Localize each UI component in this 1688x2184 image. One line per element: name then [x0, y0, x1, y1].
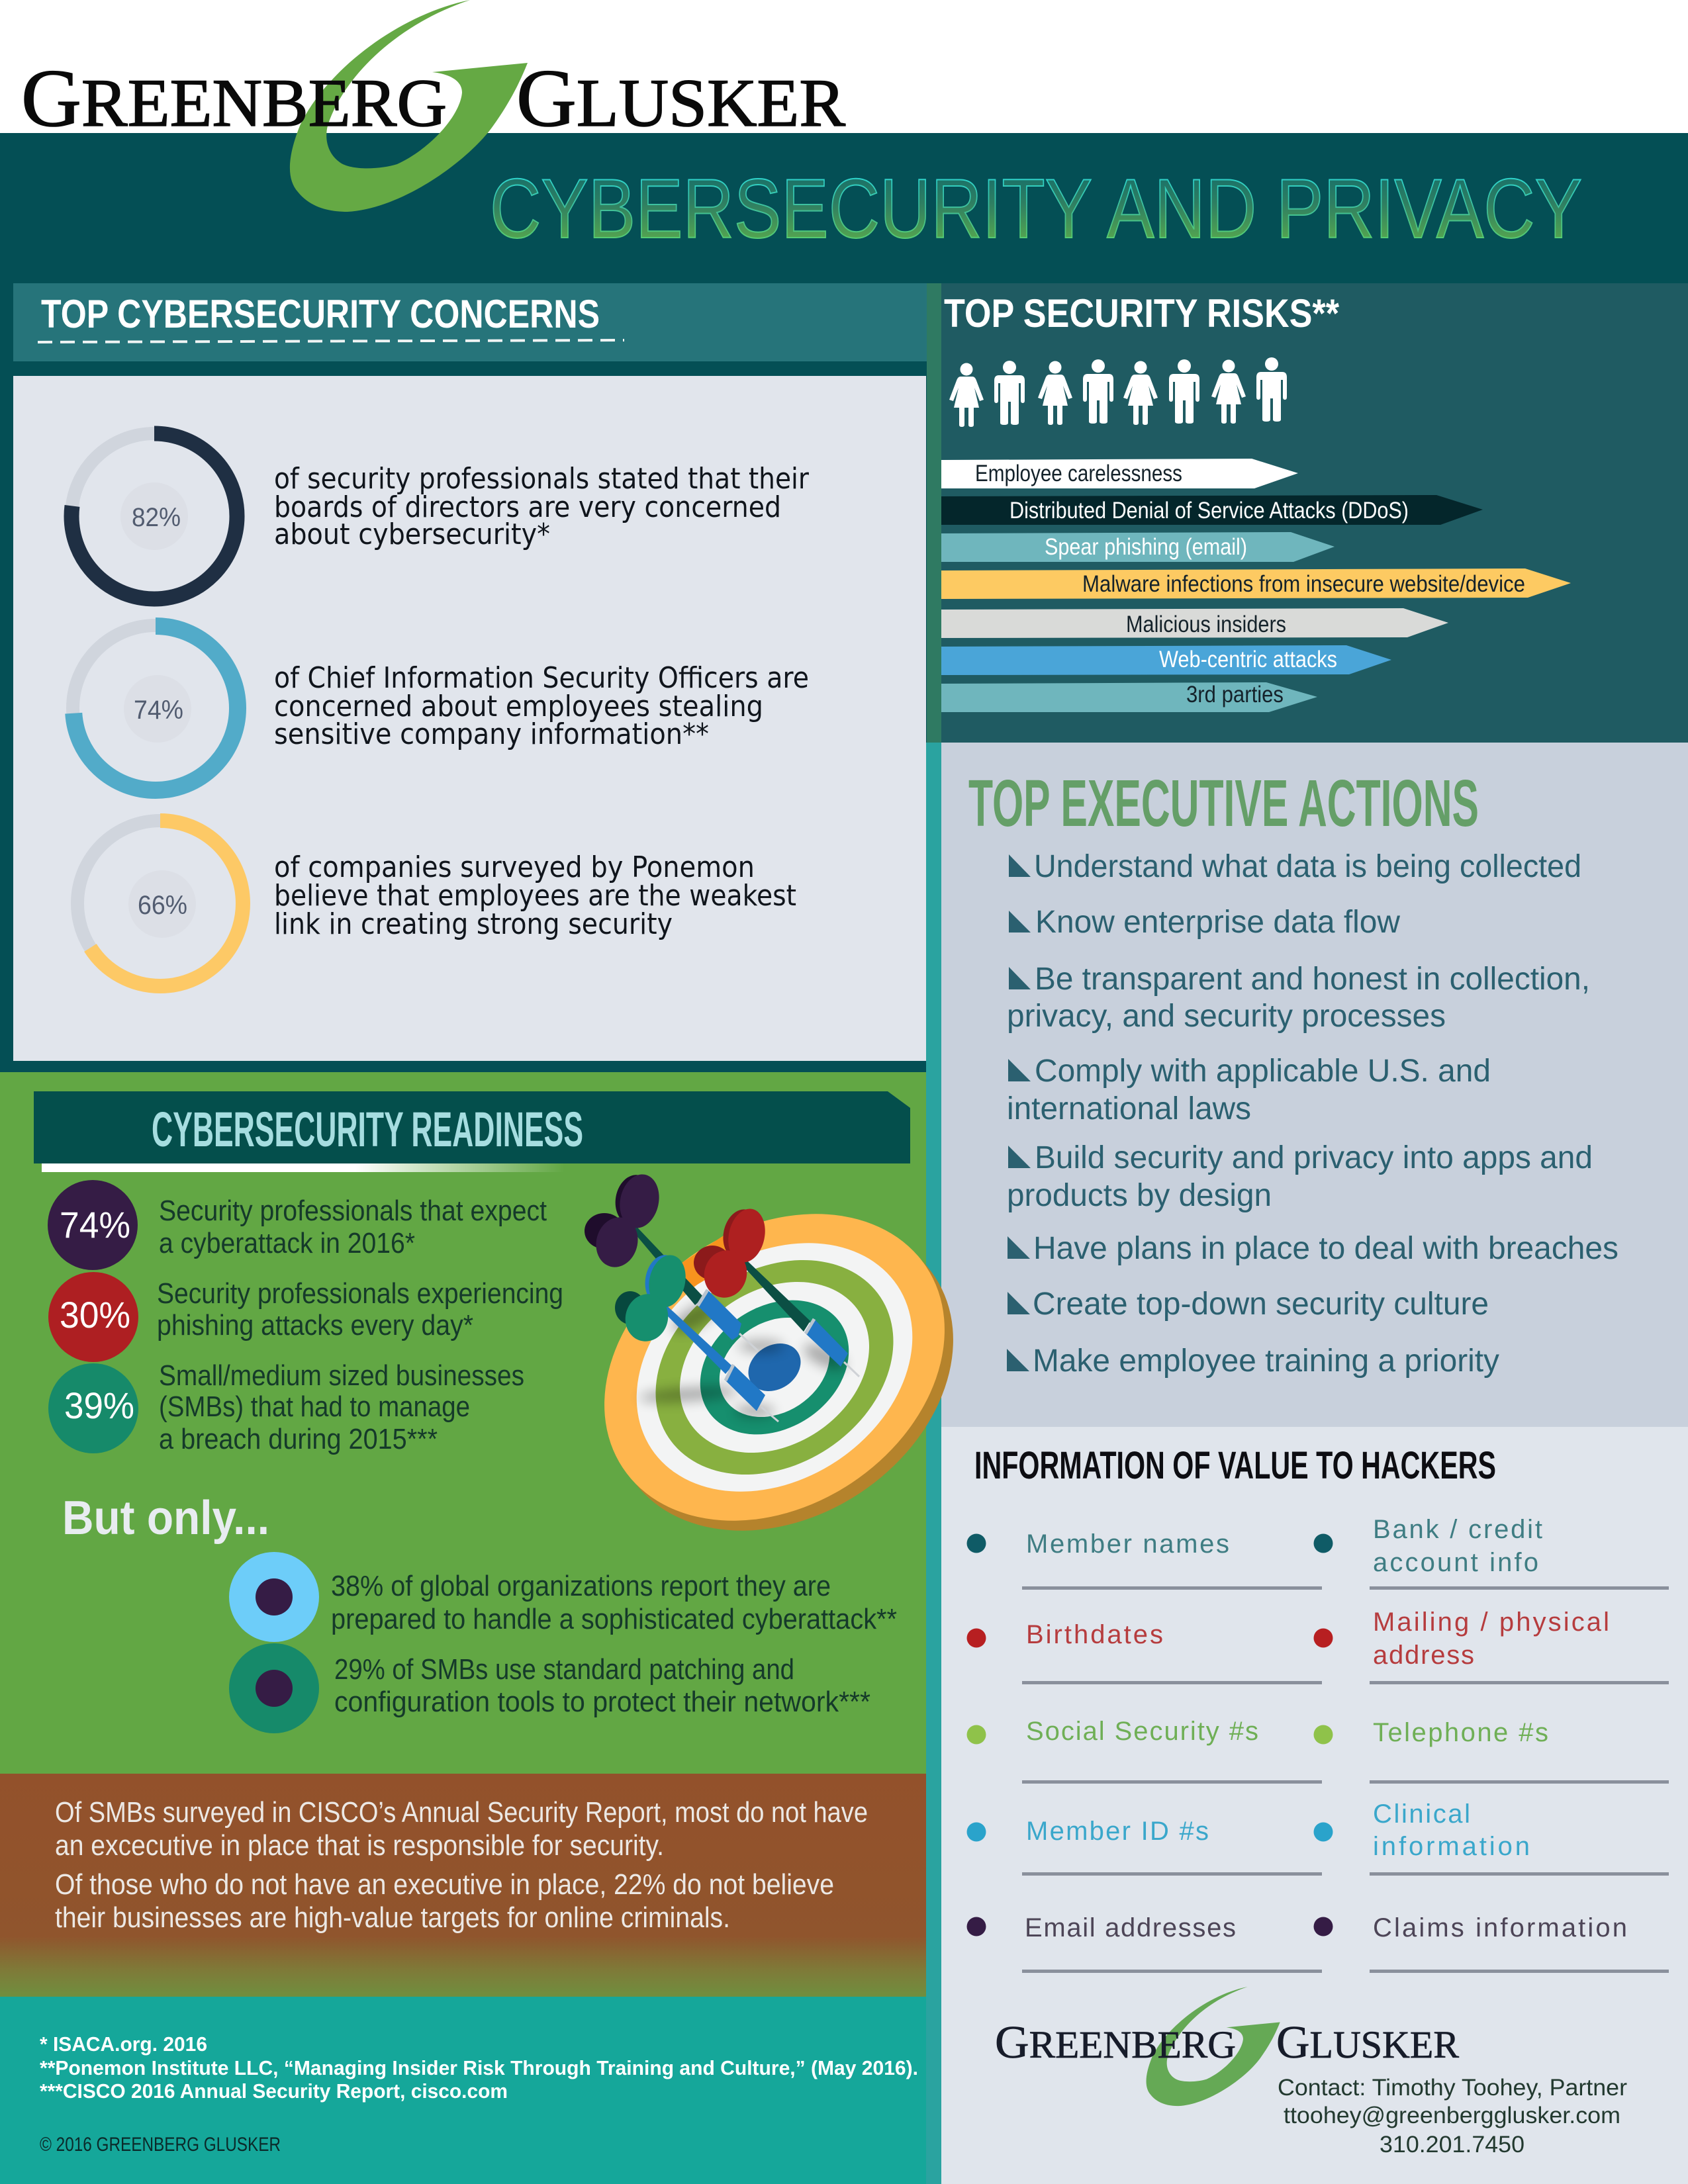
- list: executive actions: Build security and privacy into apps and: [1035, 1140, 1593, 1175]
- dart: purple: [585, 1171, 758, 1351]
- arrow: malicious insiders: [941, 608, 1448, 638]
- list: left column: Member ID #s: [1026, 1817, 1209, 1846]
- heading: but only: But only...: [62, 1492, 269, 1545]
- text: 82% statement: boards of directors are very concerned: [274, 490, 781, 524]
- text: 74% statement: [274, 661, 809, 751]
- arrow: web-centric attacks: [941, 645, 1391, 675]
- stat: 38%: prepared to handle a sophisticated cyberattack**: [331, 1603, 897, 1635]
- arrow: employee carelessness: Employee carelessness: [975, 461, 1182, 486]
- panel: cybersecurity readiness: [0, 1072, 926, 1774]
- illustration: dartboard with darts: [546, 1151, 1011, 1594]
- panel: footnotes: **Ponemon Institute LLC, “Managing Insider Risk Through Training and Culture,” (May 2016).: [40, 2056, 918, 2079]
- list: right column: Mailing / physical: [1373, 1608, 1609, 1637]
- list: left column: Email addresses: [1025, 1913, 1236, 1942]
- banner: readiness heading: CYBERSECURITY READINESS: [152, 1102, 583, 1157]
- banner: readiness heading: [34, 1091, 910, 1163]
- text: contact details: [1278, 2075, 1627, 2158]
- panel: footnotes: ***CISCO 2016 Annual Security Report, cisco.com: [40, 2079, 508, 2103]
- dart: red: [694, 1205, 859, 1377]
- panel: top executive actions: [941, 743, 1688, 1427]
- stat: 39%: a breach during 2015***: [159, 1423, 438, 1455]
- heading: information of value: INFORMATION OF VALUE TO HACKERS: [974, 1444, 1496, 1487]
- text: 82% statement: of security professionals stated that their: [274, 462, 810, 496]
- panel: top security risks: [927, 283, 1688, 743]
- logo: Greenberg Glusker top: [21, 0, 845, 212]
- arrow: web-centric attacks: Web-centric attacks: [1159, 647, 1337, 672]
- arrow: DDoS: Distributed Denial of Service Attacks (DDoS): [1009, 498, 1409, 523]
- text: contact details: ttoohey@greenbergglusker.com: [1284, 2103, 1620, 2128]
- text: 66% statement: of companies surveyed by Ponemon: [274, 850, 755, 884]
- donut: 74%: [73, 625, 238, 791]
- list: left column: Member names: [1026, 1529, 1229, 1559]
- arrow: employee carelessness: [941, 459, 1298, 488]
- donut: 66%: [77, 821, 243, 986]
- stat: 39%: 39%: [64, 1385, 134, 1426]
- stat: 30%: phishing attacks every day*: [157, 1309, 473, 1342]
- stat: 29%: 29% of SMBs use standard patching and: [334, 1653, 794, 1686]
- panel: CISCO findings: their businesses are high-value targets for online criminals.: [55, 1901, 730, 1934]
- arrow: malware infections: [941, 569, 1571, 599]
- list: right column: information: [1373, 1832, 1530, 1861]
- vertical teal stripe: [926, 743, 941, 2184]
- stat: 39%: (SMBs) that had to manage: [159, 1390, 470, 1423]
- logo: Greenberg Glusker bottom: GLUSKER: [1276, 2017, 1459, 2068]
- stat: 38%: 38% of global organizations report they are: [331, 1570, 831, 1602]
- arrow: spear phishing: Spear phishing (email): [1045, 534, 1247, 560]
- stat: 74%: [48, 1180, 547, 1270]
- stat: 39%: Small/medium sized businesses: [159, 1359, 524, 1392]
- list: right column: Bank / credit: [1373, 1515, 1542, 1544]
- heading: top security risks: TOP SECURITY RISKS**: [944, 291, 1340, 336]
- arrow: spear phishing: [941, 532, 1335, 562]
- text: 82% statement: about cybersecurity*: [274, 518, 550, 551]
- dart: green: [615, 1251, 778, 1422]
- text: 74% statement: of Chief Information Security Officers are: [274, 661, 809, 695]
- list: executive actions: privacy, and security processes: [1007, 999, 1446, 1034]
- arrow: malicious insiders: Malicious insiders: [1126, 612, 1286, 637]
- logo: Greenberg Glusker bottom: [995, 1987, 1459, 2106]
- logo: Greenberg Glusker top: GREENBERG: [21, 53, 447, 144]
- list: right column: account info: [1373, 1548, 1538, 1577]
- list: right column: Clinical: [1373, 1799, 1470, 1829]
- stat: 39%: [48, 1359, 524, 1455]
- list: right column: Claims information: [1373, 1913, 1627, 1942]
- icon: row of people: [949, 357, 1287, 427]
- list: executive actions: Make employee training a priority: [1033, 1343, 1499, 1379]
- panel: footnotes: [0, 1997, 926, 2184]
- list: executive actions: products by design: [1007, 1178, 1272, 1213]
- donut: 74%: 74%: [134, 696, 183, 725]
- panel: concerns stats: [13, 376, 926, 1061]
- text: 82% statement: [274, 462, 810, 551]
- donut: 66%: 66%: [138, 891, 187, 920]
- text: 66% statement: believe that employees are the weakest: [274, 879, 796, 913]
- list: right column: Telephone #s: [1373, 1718, 1548, 1747]
- list: left column: [966, 1529, 1322, 1973]
- panel: CISCO findings: Of those who do not have an executive in place, 22% do not believe: [55, 1868, 834, 1901]
- list: executive actions: Know enterprise data flow: [1035, 905, 1400, 940]
- panel: information of value to hackers: [941, 1427, 1688, 2184]
- arrow: 3rd parties: [941, 682, 1317, 712]
- list: left column: Social Security #s: [1026, 1717, 1258, 1746]
- list: executive actions: international laws: [1007, 1091, 1251, 1126]
- text: contact details: Contact: Timothy Toohey, Partner: [1278, 2075, 1627, 2101]
- list: right column: address: [1373, 1641, 1474, 1670]
- text: 66% statement: [274, 850, 796, 941]
- list: right column: [1313, 1515, 1669, 1973]
- text: 74% statement: sensitive company information**: [274, 717, 709, 751]
- stat: 29%: configuration tools to protect their network***: [334, 1686, 870, 1718]
- list: executive actions: Understand what data is being collected: [1034, 849, 1581, 884]
- arrow: malware infections: Malware infections from insecure website/device: [1082, 571, 1525, 597]
- stat: 74%: Security professionals that expect: [159, 1195, 547, 1227]
- stat: 74%: 74%: [60, 1204, 130, 1246]
- list: executive actions: Be transparent and honest in collection,: [1035, 962, 1590, 997]
- list: executive actions: Comply with applicable U.S. and: [1035, 1054, 1491, 1089]
- donut: 82%: 82%: [132, 503, 181, 532]
- stat: 29%: [229, 1643, 870, 1733]
- panel: top cybersecurity concerns header: TOP CYBERSECURITY CONCERNS: [41, 292, 600, 336]
- stat: 30%: Security professionals experiencing: [157, 1277, 563, 1310]
- stat: 30%: [48, 1272, 563, 1362]
- header white band: [0, 0, 1688, 133]
- list: executive actions: Create top-down security culture: [1033, 1287, 1489, 1322]
- panel: top cybersecurity concerns header: [13, 283, 928, 361]
- list: executive actions: Have plans in place to deal with breaches: [1033, 1231, 1618, 1266]
- white underline bar: [42, 1163, 565, 1172]
- logo: Greenberg Glusker bottom: GREENBERG: [995, 2017, 1236, 2068]
- arrow: 3rd parties: 3rd parties: [1186, 682, 1284, 707]
- stat: 30%: 30%: [60, 1294, 130, 1336]
- text: 66% statement: link in creating strong security: [274, 907, 673, 941]
- panel: footnotes: © 2016 GREENBERG GLUSKER: [40, 2134, 281, 2156]
- text: contact details: 310.201.7450: [1380, 2132, 1524, 2158]
- panel: CISCO findings: Of SMBs surveyed in CISCO’s Annual Security Report, most do not have: [55, 1796, 868, 1829]
- list: executive actions: [1007, 849, 1618, 1379]
- logo: Greenberg Glusker top: GLUSKER: [516, 53, 845, 144]
- list: left column: Birthdates: [1026, 1620, 1163, 1649]
- donut: 82%: [71, 433, 237, 599]
- stat: 74%: a cyberattack in 2016*: [159, 1227, 415, 1259]
- panel: CISCO findings: [0, 1774, 926, 1997]
- panel: footnotes: * ISACA.org. 2016: [40, 2032, 207, 2056]
- panel: CISCO findings: an excecutive in place that is responsible for security.: [55, 1829, 664, 1862]
- text: 74% statement: concerned about employees stealing: [274, 690, 763, 723]
- stat: 38%: [229, 1552, 897, 1642]
